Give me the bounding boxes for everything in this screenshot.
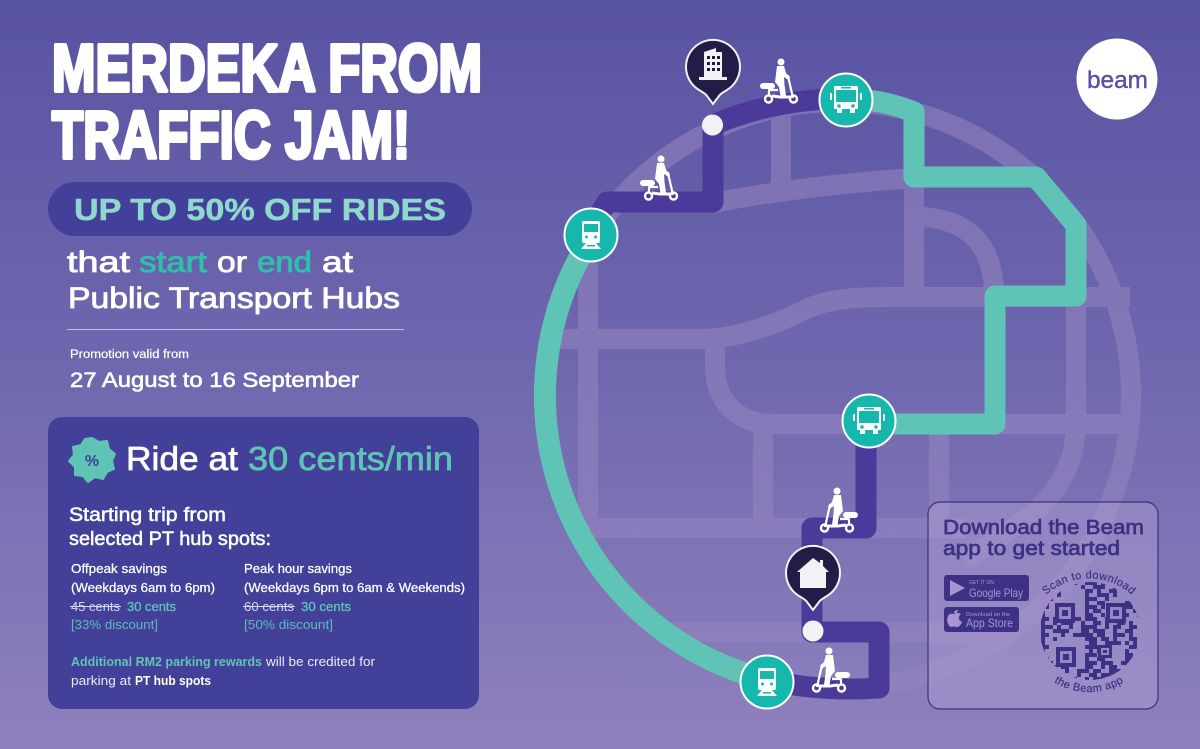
promotion dates: 27 August to 16 September [70,369,359,392]
peak hour savings: Peak hour savings [244,562,352,576]
station: bus middle [842,394,896,448]
stop dot: office [702,114,723,136]
offpeak savings: Offpeak savings [71,562,167,576]
icon: scooter rider 4 [813,648,850,692]
icon: scooter rider 2 [640,156,677,200]
station: train top [564,208,618,262]
button: app store [944,607,1019,632]
title [52,31,482,173]
promo pill: UP TO 50% OFF RIDES [74,192,446,227]
title: MERDEKA FROM [52,31,482,106]
pin: home [786,546,840,610]
route: teal transit line [846,98,1076,424]
qr finder: top right [1106,603,1126,623]
panel heading [126,440,453,477]
icon: scooter rider 1 [760,58,797,102]
subheading: that [67,246,131,279]
route: purple ride top [595,98,846,222]
parking rewards note: PT hub spots [135,674,211,688]
peak hour savings: 30 cents [301,600,351,614]
panel subheading: Starting trip from [69,505,226,526]
parking rewards note: will be credited for [265,655,375,669]
subheading [67,246,400,315]
station: train bottom [740,656,794,708]
subheading: start [139,246,208,279]
download heading [943,516,1144,560]
panel: ride pricing [48,417,479,709]
logo: beam: beam [1087,67,1148,94]
promo pill [48,182,472,236]
icon: discount badge [69,438,115,482]
offpeak savings [70,562,215,632]
logo: beam [1076,38,1158,120]
parking rewards note: Additional RM2 parking rewards [71,655,262,669]
globe road map [545,102,1131,688]
panel heading: 30 cents/min [248,440,453,477]
peak hour savings: (Weekdays 6pm to 6am & Weekends) [244,581,465,595]
icon: scooter rider 3 [821,488,858,532]
promotion dates [70,349,359,392]
parking rewards note [71,655,375,688]
route: teal transit arc [545,238,767,680]
icon: discount badge: % [85,453,99,470]
panel heading: Ride at [126,440,238,477]
offpeak savings: 45 cents [71,600,120,614]
subheading: at [322,246,354,279]
subheading: end [257,246,312,279]
download heading: app to get started [943,537,1120,560]
panel subheading [69,505,271,550]
button: google play: GET IT ON [969,580,994,586]
qr caption top: Scan to download [1042,570,1136,594]
offpeak savings: [33% discount] [71,618,158,632]
button: google play [944,575,1029,601]
subheading: Public Transport Hubs [68,282,400,315]
parking rewards note: parking at [71,674,132,688]
pin: office building [686,40,740,104]
title: TRAFFIC JAM! [52,98,410,173]
qr caption bottom: the Beam app [1055,676,1122,692]
qr finder: top left [1055,603,1075,623]
qr finder: bottom right [1098,645,1112,658]
button: app store: Download on the [966,612,1010,618]
offpeak savings: 30 cents [127,600,176,614]
button: app store: App Store [966,616,1013,630]
subheading: or [217,246,247,279]
download heading: Download the Beam [943,516,1144,539]
panel: download [927,501,1159,710]
panel subheading: selected PT hub spots: [69,529,271,550]
stop dot: home [802,620,824,642]
peak hour savings: [50% discount] [244,618,333,632]
peak hour savings [243,562,465,632]
station: bus top [820,74,872,126]
qr finder: bottom left [1056,647,1076,667]
route: purple ride bottom [767,424,879,689]
qr code [1041,583,1145,679]
promotion dates: Promotion valid from [70,349,189,361]
offpeak savings: (Weekdays 6am to 6pm) [71,581,215,595]
button: google play: Google Play [969,586,1023,600]
peak hour savings: 60 cents [244,600,294,614]
